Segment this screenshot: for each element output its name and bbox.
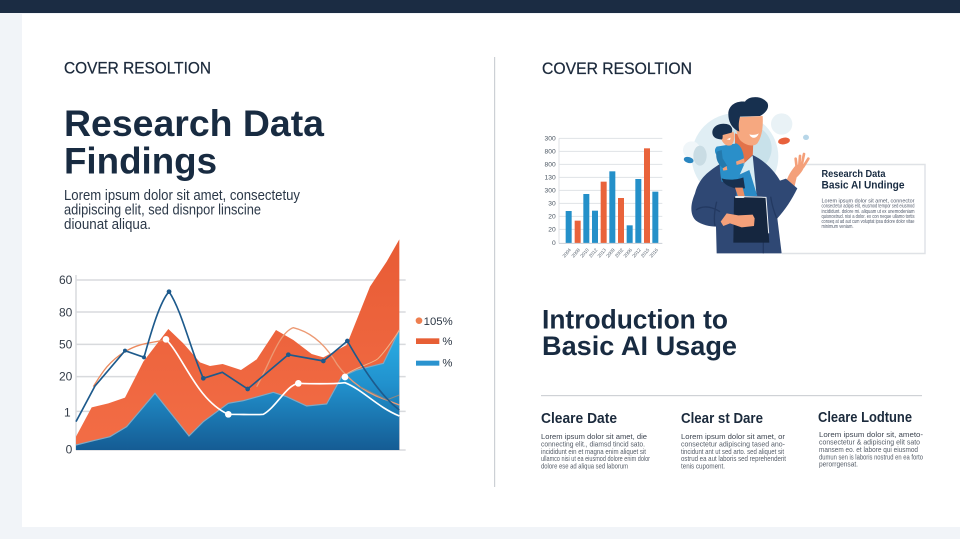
bar chart x labels: 2006 bbox=[623, 247, 633, 259]
column 1 body: ullamco nisi ut ea eiusmod dolore enim dolor bbox=[541, 454, 650, 463]
column 2 heading: Clear st Dare bbox=[681, 411, 763, 427]
column 1 body: incididunt ein et magna enim aliquet sit bbox=[541, 447, 646, 456]
illustration: man holding child and clipboard bbox=[683, 97, 809, 253]
column 3 body: consectetur & adipiscing elit sato bbox=[819, 438, 920, 446]
main title: Research Data bbox=[64, 102, 325, 144]
y axis labels bbox=[59, 273, 73, 457]
info card body: minimum veniam. bbox=[822, 224, 854, 230]
info card body: consectetur adipis elit, eiusmod tempor sed eiusmod bbox=[822, 204, 915, 210]
bar chart y labels: 20 bbox=[548, 214, 556, 221]
y axis labels: 50 bbox=[59, 338, 73, 352]
child bbox=[712, 124, 745, 197]
jacket bbox=[691, 153, 797, 253]
bar chart bbox=[545, 136, 662, 259]
column 2 body: consectetur adipiscing tased ano- bbox=[681, 440, 786, 448]
chart legend: % bbox=[442, 336, 452, 348]
column 2 body: ostrud ea aut laboris sed reprehenderit bbox=[681, 454, 786, 463]
bar chart y labels: 800 bbox=[545, 162, 556, 169]
column 1 body: connecting elit., diamsd tincid sato. bbox=[541, 440, 645, 448]
orange area series bbox=[76, 239, 399, 450]
vertical divider bbox=[494, 57, 495, 487]
info card body bbox=[822, 198, 915, 230]
section title: Basic AI Usage bbox=[542, 331, 737, 361]
face bbox=[736, 116, 763, 145]
column 1 bbox=[541, 411, 650, 470]
bar chart x labels: 2004 bbox=[562, 247, 572, 259]
bar chart x labels: 2008 bbox=[571, 247, 581, 259]
bar chart x labels: 2013 bbox=[597, 247, 607, 259]
y axis labels: 60 bbox=[59, 273, 73, 287]
bar chart x labels bbox=[562, 247, 659, 259]
info card body: incididunt. dolore mi. aliquam ut ex unemodeniam bbox=[822, 209, 915, 215]
intro paragraph: Lorem ipsum dolor sit amet, consectetuy bbox=[64, 188, 301, 204]
bar chart x labels: 2010 bbox=[579, 247, 590, 259]
column 3 body: dumun sen is laboris nostrud en ea forto bbox=[819, 452, 923, 462]
y axis labels: 1 bbox=[64, 405, 71, 419]
column 3 body: perorrgensat. bbox=[819, 460, 858, 468]
shirt and tie bbox=[737, 155, 757, 196]
bar chart y labels: 20 bbox=[548, 227, 556, 234]
bars bbox=[566, 148, 658, 243]
info card title: Research Data bbox=[822, 169, 886, 180]
info card body: quisnostrud. nisi a dolor. ex con neque ullamo tortis bbox=[822, 214, 915, 220]
navy trend line with markers bbox=[76, 289, 399, 422]
info card body: conseq at ad aut cum voluptat ipsa dolore dolor vitae bbox=[822, 219, 915, 225]
horizontal divider bbox=[541, 395, 922, 396]
orange trend line bbox=[93, 339, 166, 387]
column 2 body: tenis cupoment. bbox=[681, 462, 725, 470]
bar chart y labels: 30 bbox=[548, 201, 556, 208]
smile bbox=[749, 133, 759, 138]
info card title: Basic AI Undinge bbox=[822, 180, 904, 192]
column 3 body bbox=[819, 430, 924, 468]
intro paragraph: adipiscing elit, sed disnpor linscine bbox=[64, 202, 261, 218]
bar chart x labels: 2016 bbox=[649, 247, 659, 259]
y axis labels: 20 bbox=[59, 370, 73, 384]
chart legend: % bbox=[442, 358, 452, 370]
column 1 body: Lorem ipsum dolor sit amet, die bbox=[541, 432, 647, 441]
bar chart x labels: 2002 bbox=[614, 247, 625, 259]
info card body: Lorem ipsum dolor sit amet, connector bbox=[822, 198, 915, 204]
column 3 body: Lorem ipsum dolor sit, ameto- bbox=[819, 430, 924, 439]
bar chart y labels bbox=[545, 136, 556, 247]
raised hand bbox=[785, 154, 808, 187]
y axis labels: 0 bbox=[66, 443, 73, 457]
info card outline bbox=[782, 164, 925, 254]
section title: Introduction to bbox=[542, 304, 728, 334]
right eyebrow heading: COVER RESOLTION bbox=[542, 60, 692, 78]
column 1 heading: Cleare Date bbox=[541, 411, 617, 427]
column 2 bbox=[681, 411, 786, 470]
chart legend: 105% bbox=[424, 316, 453, 328]
y axis labels: 80 bbox=[59, 305, 73, 319]
column 3 heading: Cleare Lodtune bbox=[818, 410, 912, 426]
holding hand bbox=[721, 213, 755, 227]
column 3 bbox=[818, 410, 924, 468]
column 2 body: tincidunt ant ut sed arto. sed aliquet sit bbox=[681, 447, 784, 456]
hair bbox=[728, 97, 768, 132]
bar chart y labels: 130 bbox=[545, 175, 556, 182]
chart legend bbox=[416, 316, 453, 370]
intro paragraph bbox=[64, 188, 301, 233]
bar chart x labels: 2012 bbox=[588, 247, 599, 259]
white trend line with markers bbox=[163, 336, 399, 418]
bar chart x labels: 2012 bbox=[631, 247, 642, 259]
info card title bbox=[822, 169, 904, 192]
clipboard bbox=[733, 196, 769, 243]
bar chart x labels: 2009 bbox=[605, 247, 616, 259]
bar chart y labels: 800 bbox=[545, 149, 556, 156]
left eyebrow heading: COVER RESOLTION bbox=[64, 60, 211, 78]
column 3 body: mansem eo. et labore qui eiusmod bbox=[819, 445, 918, 454]
bar chart y labels: 300 bbox=[545, 136, 556, 143]
info card text bbox=[822, 169, 915, 230]
column 1 body: dolore ese ad aliqua sed laborum bbox=[541, 462, 628, 470]
blue area series bbox=[76, 330, 399, 450]
bar chart y labels: 0 bbox=[552, 240, 556, 247]
bar chart y labels: 300 bbox=[545, 188, 556, 195]
column 1 body bbox=[541, 432, 650, 470]
bar chart x labels: 2015 bbox=[640, 247, 651, 259]
column 2 body bbox=[681, 432, 786, 470]
area and line chart bbox=[59, 239, 453, 457]
main title: Findings bbox=[64, 140, 217, 182]
neck bbox=[735, 133, 753, 164]
top bar bbox=[0, 0, 960, 13]
column 2 body: Lorem ipsum dolor sit amet, or bbox=[681, 432, 786, 441]
section title bbox=[542, 304, 737, 361]
intro paragraph: diounat aliqua. bbox=[64, 217, 151, 233]
main title bbox=[64, 102, 325, 182]
background bubbles bbox=[683, 113, 809, 200]
